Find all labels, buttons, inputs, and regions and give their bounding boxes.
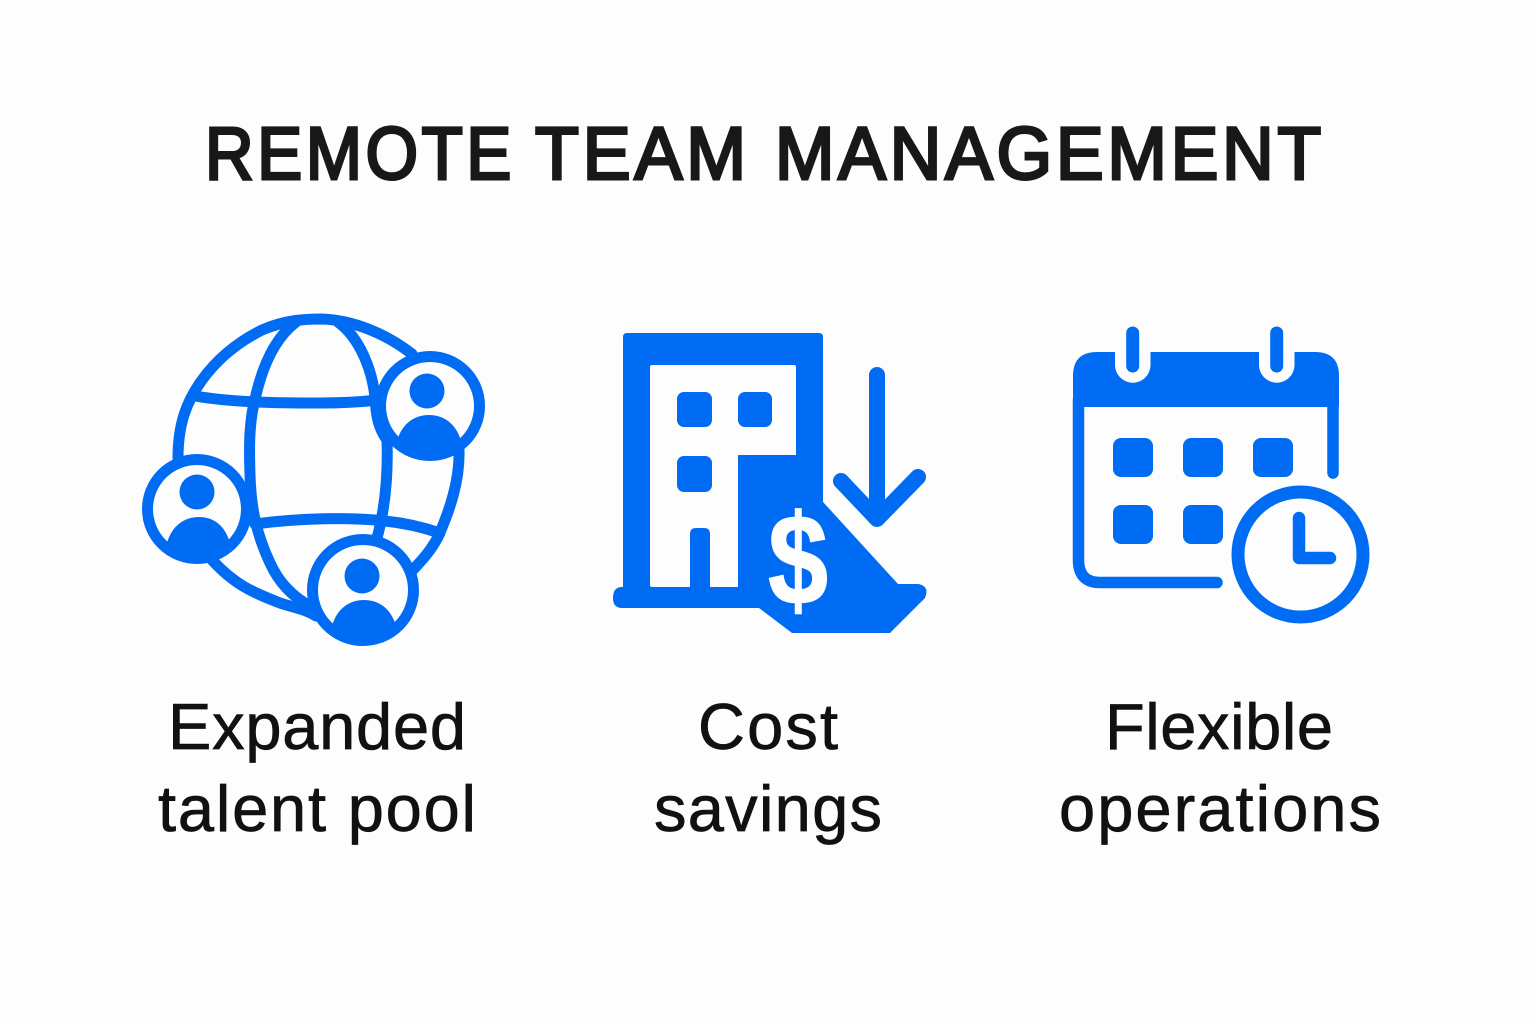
icon: down arrow xyxy=(841,375,918,519)
label: expanded talent pool: talent pool xyxy=(158,772,476,845)
icon: globe with people xyxy=(148,319,480,640)
title xyxy=(205,112,1325,195)
title: REMOTE xyxy=(205,112,515,195)
icon: person bottom xyxy=(312,540,414,640)
label: expanded talent pool: Expanded xyxy=(168,690,466,763)
icon: clock xyxy=(1238,492,1363,617)
label: cost savings: savings xyxy=(654,772,882,845)
title: MANAGEMENT xyxy=(775,112,1325,195)
title: TEAM xyxy=(535,112,750,195)
icon: building with dollar and down arrow xyxy=(613,333,926,633)
icon: dollar sign: $ xyxy=(768,489,828,632)
label: flexible operations: Flexible xyxy=(1105,690,1333,763)
icon: person left xyxy=(148,460,246,558)
label: cost savings: Cost xyxy=(698,690,838,763)
label: flexible operations: operations xyxy=(1059,772,1381,845)
label: cost savings xyxy=(654,690,882,845)
label: expanded talent pool xyxy=(158,690,476,845)
icon: calendar with clock xyxy=(1073,333,1363,617)
icon: person top right xyxy=(380,356,480,456)
label: flexible operations xyxy=(1059,690,1381,845)
